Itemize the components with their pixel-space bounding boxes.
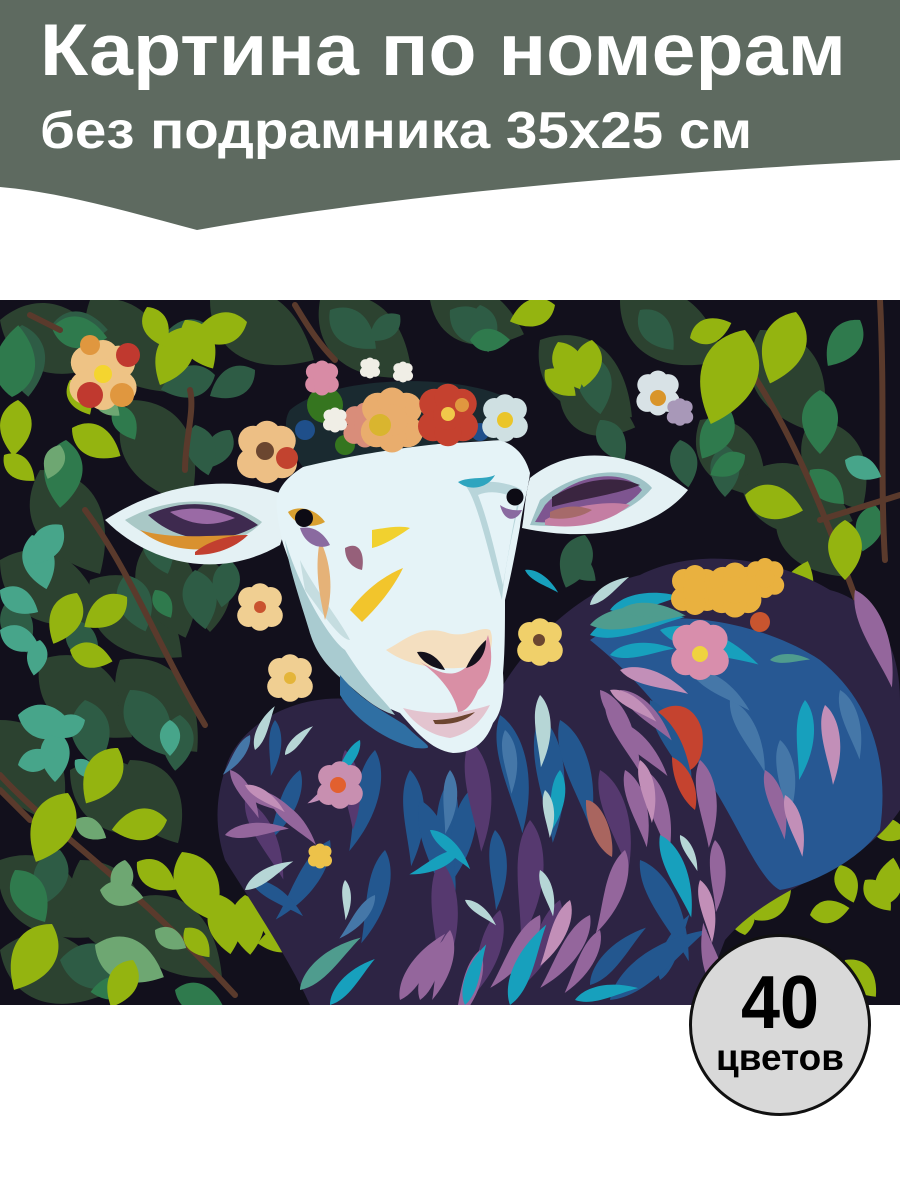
background foliage bbox=[0, 271, 887, 1023]
mauve strokes bbox=[224, 585, 900, 1030]
loose flowers bbox=[69, 335, 784, 868]
badge: 40 colours bbox=[690, 936, 870, 1114]
right ear bbox=[522, 455, 688, 534]
branches bbox=[0, 300, 900, 995]
dark purple strokes bbox=[244, 746, 631, 990]
left ear bbox=[105, 484, 287, 564]
wool body bbox=[218, 559, 900, 1030]
flower wreath bbox=[237, 358, 528, 483]
teal leaves bbox=[0, 450, 886, 784]
teal strokes bbox=[324, 566, 814, 1009]
badge: 40 colours: цветов bbox=[716, 1037, 844, 1078]
face shading bbox=[285, 540, 395, 715]
badge: 40 colours: 40 bbox=[741, 960, 819, 1044]
painting: sheep with flower wreath among leaves bbox=[0, 271, 900, 1030]
green wool strokes bbox=[294, 598, 810, 996]
sage leaves bbox=[38, 388, 191, 997]
head bbox=[277, 440, 530, 753]
lighter blue strokes bbox=[222, 663, 872, 945]
pale strokes bbox=[241, 570, 704, 926]
subtitle: без подрамника 35х25 см bbox=[40, 102, 752, 160]
dark blue wool bbox=[590, 618, 882, 890]
pink strokes bbox=[243, 662, 848, 970]
blue wool strokes bbox=[247, 695, 710, 1010]
red strokes bbox=[658, 706, 703, 770]
title: Картина по номерам bbox=[40, 8, 846, 91]
bright green leaves bbox=[0, 292, 900, 1013]
header banner bbox=[0, 0, 900, 230]
